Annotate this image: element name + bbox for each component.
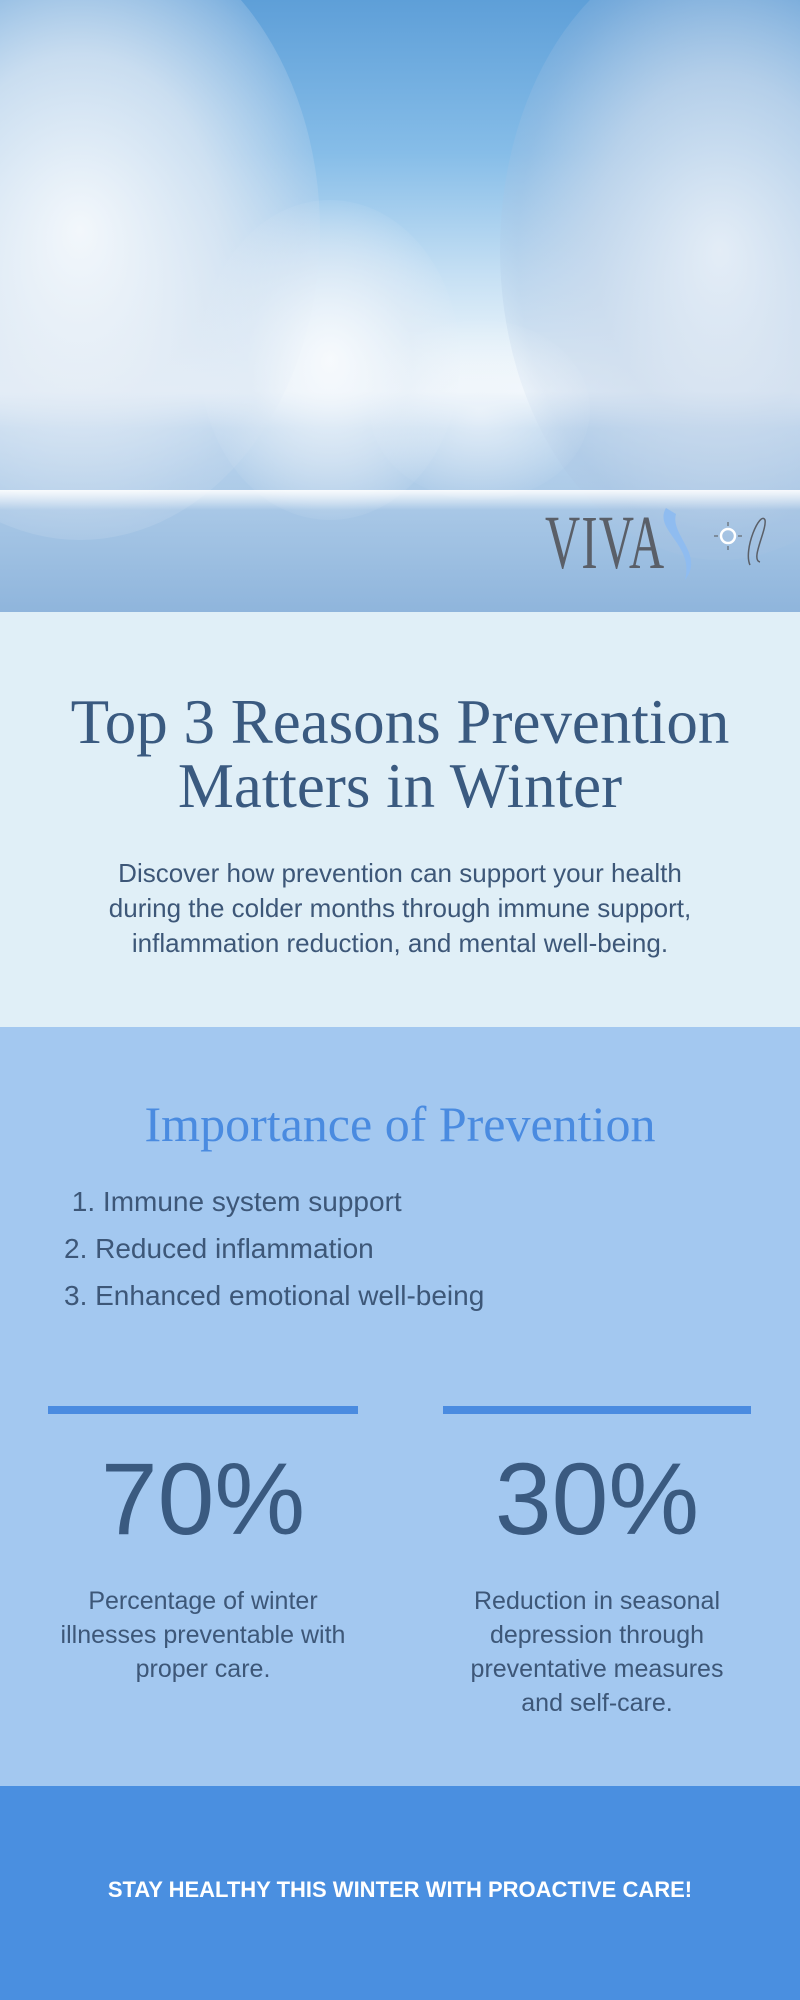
stat: 70% [48, 1406, 358, 1683]
numbered list [64, 1186, 484, 1311]
title: Matters in Winter [178, 751, 622, 821]
stat: 30%: 30% [495, 1442, 699, 1556]
stat: 30%: Reduction in seasonal depression through preventative measures and self-care. [471, 1587, 723, 1717]
numbered list: 3. Enhanced emotional well-being [64, 1280, 484, 1311]
stat: 30% [443, 1406, 751, 1717]
footer call to action [0, 1786, 800, 2000]
numbered list: 1. Immune system support [72, 1186, 402, 1217]
footer text: STAY HEALTHY THIS WINTER WITH PROACTIVE CARE! [108, 1877, 692, 1902]
stat: 70%: Percentage of winter illnesses preventable with proper care. [61, 1587, 345, 1683]
stat: 70%: 70% [101, 1442, 305, 1556]
logo: VIVA Sol [545, 501, 766, 585]
intro section [0, 612, 800, 1027]
intro paragraph: Discover how prevention can support your health during the colder months through immune support, inflammation reduction, and mental well-being. [109, 858, 691, 958]
title: Top 3 Reasons Prevention [71, 687, 729, 757]
title [71, 687, 729, 821]
hero photo: winter trees [0, 0, 800, 612]
importance section [0, 1027, 800, 1786]
logo: VIVA Sol: VIVA [545, 501, 665, 585]
section heading: Importance of Prevention [145, 1096, 655, 1152]
numbered list: 2. Reduced inflammation [64, 1233, 374, 1264]
